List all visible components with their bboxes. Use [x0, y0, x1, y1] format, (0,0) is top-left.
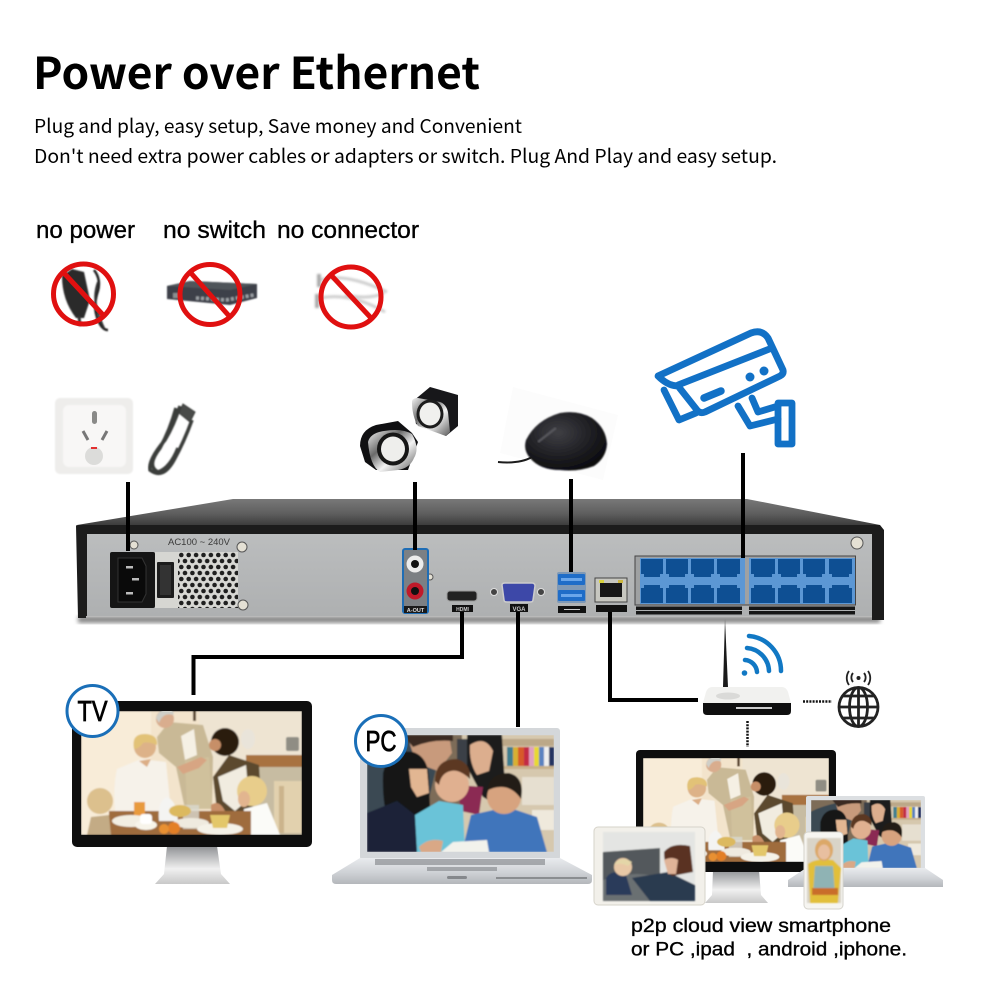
cable: VGA to PC [516, 612, 520, 727]
VGA port: VGA [512, 607, 526, 613]
TV badge: TV [78, 696, 108, 728]
cable: power [126, 482, 130, 551]
icon: globe with signal [839, 671, 878, 726]
icon: no switch [167, 264, 257, 324]
icon: power cable [150, 404, 195, 473]
label: no connector: no connector [277, 217, 419, 244]
icon: mouse [498, 387, 618, 480]
cable: LAN to router [610, 612, 698, 700]
cable: USB mouse [569, 479, 573, 572]
small laptop lid [806, 796, 925, 871]
screws [130, 537, 863, 610]
small laptop base [788, 868, 943, 887]
cable: audio [413, 482, 417, 550]
desktop monitor photo [643, 756, 829, 862]
USB ports [557, 572, 586, 613]
recorder top cover [77, 499, 880, 525]
cable: camera [741, 453, 745, 558]
laptop screen photo [367, 735, 554, 852]
port labels [636, 606, 855, 614]
TV monitor [67, 686, 312, 884]
TV screen photo [81, 709, 302, 835]
icon: wall socket [55, 398, 133, 474]
devices group [594, 750, 943, 909]
PC badge: PC [366, 726, 396, 758]
HDMI port: HDMI [456, 607, 469, 613]
link: router to devices [746, 721, 749, 747]
label: no power: no power [36, 217, 135, 244]
rear speaker [412, 387, 458, 436]
ventilation grille [178, 552, 238, 608]
subtitle line 2: Don't need extra power cables or adapters or switch. Plug And Play and easy setup. [34, 142, 777, 169]
recorder back plate [87, 534, 872, 616]
audio out port [403, 549, 428, 614]
network port [595, 578, 627, 612]
TV frame [72, 701, 312, 847]
icon: camera [658, 332, 792, 444]
audio out port: A-OUT [407, 608, 425, 614]
router antenna [723, 619, 728, 687]
laptop lid [360, 728, 560, 860]
router [703, 619, 791, 715]
small laptop photo [811, 800, 921, 868]
power inlet and switch [110, 552, 178, 608]
recorder shadow [78, 616, 880, 623]
HDMI port [447, 591, 477, 613]
caption: or PC ,ipad , android ,iphone. [631, 938, 907, 960]
TV stand [155, 846, 230, 884]
tablet [594, 827, 705, 905]
voltage label: AC100 ~ 240V [168, 537, 231, 548]
TV badge [67, 686, 118, 736]
desktop monitor frame [636, 750, 836, 872]
icon: no power adapter [54, 264, 114, 330]
label: no switch: no switch [163, 217, 266, 244]
router body [703, 687, 791, 703]
PC laptop [332, 716, 592, 884]
icon: speakers [360, 387, 458, 472]
recorder body frame [76, 525, 884, 620]
phone [804, 832, 843, 909]
PoE ports block [635, 556, 856, 614]
link: router to internet [803, 700, 832, 703]
icon: wifi signal [742, 636, 781, 676]
desktop monitor stand [705, 870, 768, 903]
icon: no connector [315, 267, 387, 327]
cable: HDMI to TV [194, 612, 462, 695]
front speaker [360, 421, 418, 472]
PC badge [356, 716, 406, 766]
laptop base [332, 858, 592, 884]
caption: p2p cloud view smartphone [631, 915, 891, 937]
title: Power over Ethernet [33, 38, 480, 102]
caption [631, 915, 907, 960]
subtitle line 1: Plug and play, easy setup, Save money and Convenient [34, 112, 522, 139]
VGA port [490, 583, 544, 613]
NVR recorder [76, 499, 884, 623]
